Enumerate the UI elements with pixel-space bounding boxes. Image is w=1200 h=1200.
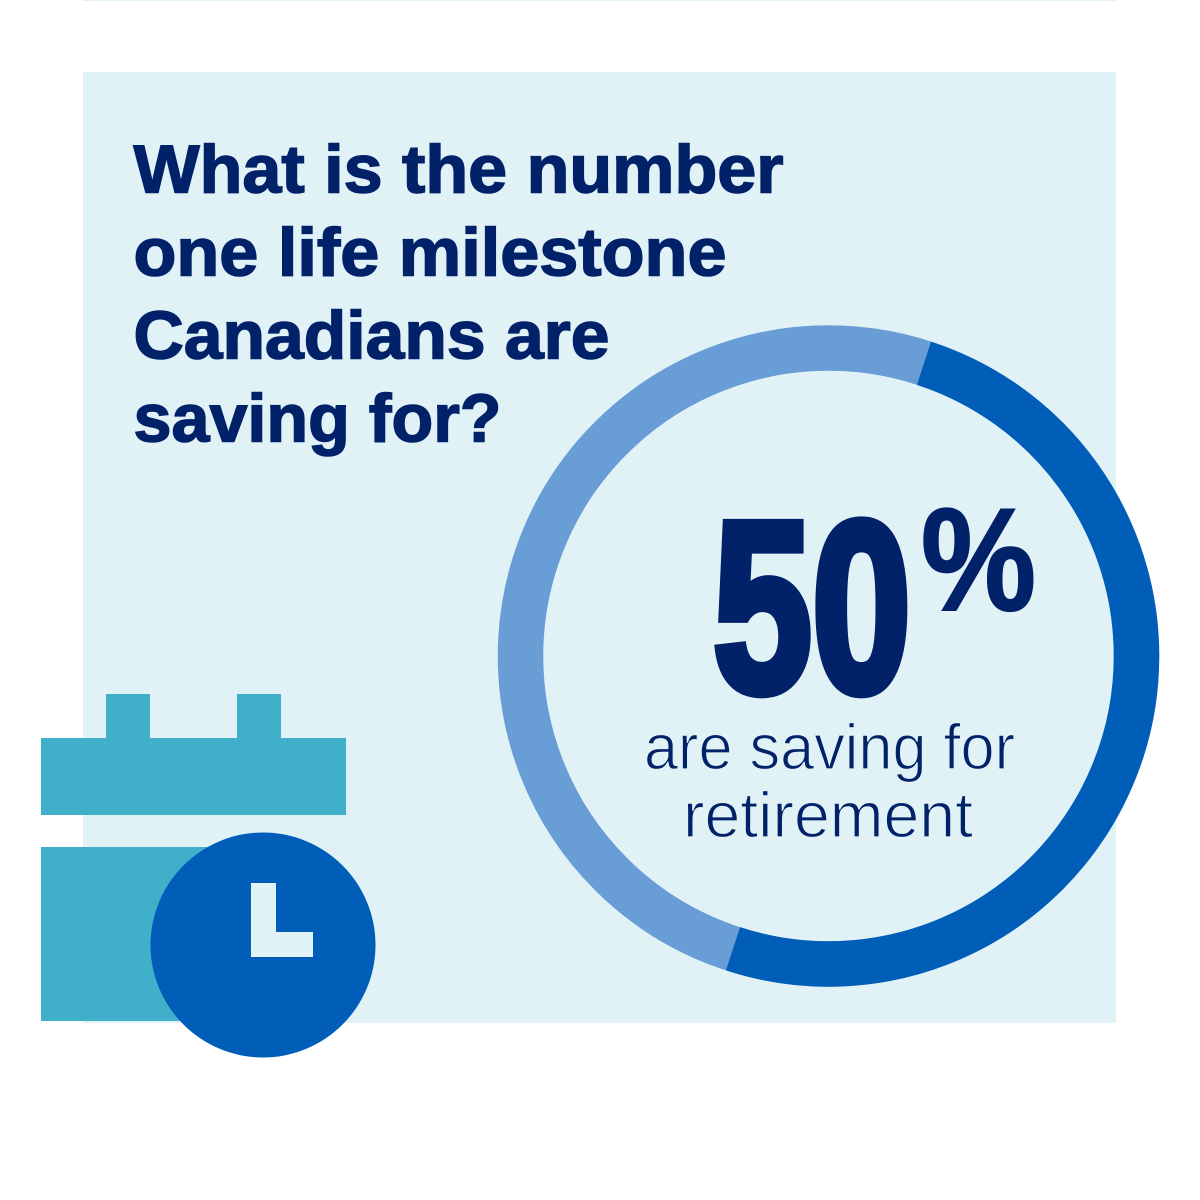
icon: calendar with clock: [41, 694, 376, 1058]
title: Canadians are: [134, 298, 610, 374]
calendar top: [41, 694, 346, 815]
panel: background: [83, 72, 1116, 1023]
title: one life milestone: [134, 214, 726, 290]
title: [134, 132, 784, 456]
caption: are saving for: [644, 711, 1015, 783]
title: saving for?: [134, 380, 502, 456]
caption: [644, 711, 1015, 851]
clock hands: [251, 883, 313, 957]
statistic: 50%: 50: [713, 472, 911, 743]
clock face: [150, 832, 376, 1058]
title: What is the number: [134, 132, 784, 208]
caption: retirement: [683, 779, 973, 851]
donut chart: [520, 348, 1136, 964]
calendar body: [41, 847, 221, 1021]
statistic: 50%: %: [921, 478, 1036, 641]
